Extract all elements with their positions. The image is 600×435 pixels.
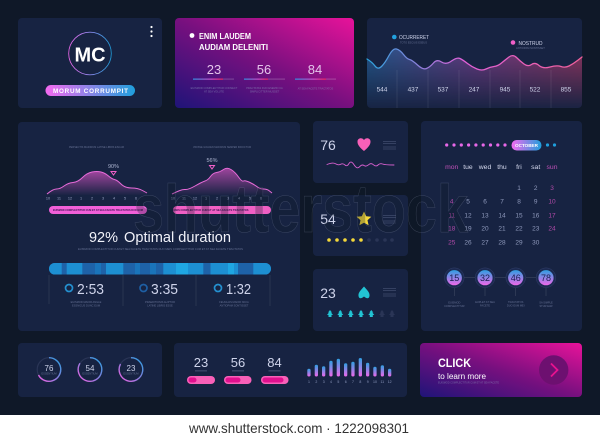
connector lines (454, 278, 546, 296)
time 3:35: LATINE LIBRIS ESSE (147, 304, 173, 308)
axis labels: 10 (171, 196, 175, 200)
ring 76 (37, 358, 61, 381)
badge 32 (475, 268, 495, 308)
caption: EUISMOD COMPLECTITUR CUM ET SEA FACETE TRACTATOS DUO MEIS COMPLECTITUR CUM ET AT SEA FACETE TRACTATOS (78, 247, 243, 251)
badge 46: 46 (511, 273, 521, 283)
chart values (377, 86, 572, 94)
placeholder lines (383, 216, 396, 223)
meter 56: 56 (231, 355, 245, 370)
chart values: 437 (408, 86, 419, 94)
axis labels: 2 (91, 196, 93, 200)
icon: arrow button (539, 355, 568, 385)
weekday headers (445, 164, 558, 171)
calendar dates: 26 (464, 240, 472, 246)
legend: nostrud (511, 40, 545, 50)
area fill (367, 49, 582, 108)
panel: call to action (420, 343, 582, 397)
axis labels: 3 (102, 196, 104, 200)
pink label right (173, 206, 271, 214)
icon: heart (358, 138, 370, 151)
ring 54: ESSENTIUM (82, 372, 98, 376)
axis labels: 5 (249, 196, 251, 200)
footer strip (0, 415, 600, 435)
chart values: 247 (469, 86, 480, 94)
pink label right: MEIS COMPLECTITUR CUM ET AT SEA FACETE TRACTATOS (174, 208, 249, 212)
panel: main duration (18, 122, 300, 331)
stat 56: PRACTATAS DUO ESEMIO CA (246, 86, 283, 90)
axis labels: 4 (238, 196, 240, 200)
stat 23: AT SEA VOLUTE (204, 90, 224, 94)
weekday headers: sat (531, 164, 540, 171)
time 1:32: ANTIOPAM SONTISSET (220, 304, 249, 308)
time 1:32: 1:32 (226, 281, 251, 298)
bar labels (308, 380, 392, 384)
bar chart (307, 358, 391, 376)
pulse wave (327, 162, 394, 168)
time 2:53 (66, 281, 104, 308)
calendar dates: 2 (534, 185, 538, 192)
calendar dates: 18 (448, 226, 456, 232)
axis labels: 6 (135, 196, 137, 200)
panel: area chart (367, 18, 582, 108)
panel: star metric (313, 195, 408, 256)
icon: flame (358, 286, 370, 298)
stat 23 (191, 62, 238, 94)
ring 54: 54 (86, 364, 95, 373)
value: 54 (320, 211, 336, 227)
bar labels: 10 (373, 380, 377, 384)
calendar dates: 10 (548, 198, 556, 206)
time 3:35 (140, 281, 178, 308)
bullet (190, 33, 194, 38)
calendar dates: 6 (483, 198, 487, 206)
rating dots (327, 238, 394, 242)
chart captions (69, 145, 251, 149)
cta text: to learn more (438, 372, 486, 381)
calendar dates: 11 (448, 212, 455, 220)
panel: drop metric (313, 269, 408, 331)
axis labels: 4 (113, 196, 115, 200)
axis labels: 12 (193, 196, 197, 200)
column separators (397, 70, 551, 108)
axis labels: 6 (260, 196, 262, 200)
hill chart right (172, 158, 272, 195)
panel: heart metric (313, 121, 408, 183)
stat 56: SIMPLICITTER MUSDET (250, 90, 280, 94)
value: 76 (320, 137, 336, 153)
bar labels: 3 (323, 380, 325, 384)
stat 84 (295, 62, 336, 90)
badge 78 (536, 268, 556, 308)
meter 84: 84 (267, 355, 282, 370)
calendar dates: 1 (517, 185, 521, 192)
cta text: CLICK (438, 358, 472, 370)
axis labels: 3 (227, 196, 229, 200)
timeline dividers (49, 275, 270, 306)
badge 15: EUISMOD (448, 300, 460, 304)
calendar dates: 27 (481, 240, 489, 246)
badge 78: SA SIMPLE (539, 300, 553, 304)
axis labels: 2 (216, 196, 218, 200)
bar labels: 2 (315, 380, 317, 384)
axis labels: 1 (205, 196, 207, 200)
axis labels: 11 (182, 196, 186, 200)
placeholder lines (383, 288, 396, 296)
chart captions: VIDISSE GOLDEN MAIORUM SEMPER INDOCTUM (193, 145, 251, 149)
bar labels: 12 (388, 380, 392, 384)
meter 84 (261, 355, 288, 384)
axis labels (46, 196, 262, 200)
avatar monogram: MC (74, 44, 106, 66)
tree rating (327, 310, 395, 317)
panel: progress rings (18, 343, 162, 397)
meter 23: 23 (194, 355, 208, 370)
weekday headers: wed (478, 164, 491, 171)
calendar dates: 19 (464, 226, 472, 232)
panel heading: ENIM LAUDEM (199, 31, 251, 41)
meter 56 (224, 355, 252, 384)
time 2:53: ESSNICUS DUNC EUM (72, 304, 100, 308)
time 1:32: FEUGUAS MAIOR NICIA (219, 300, 249, 304)
line series (367, 49, 582, 70)
time 1:32 (214, 281, 251, 308)
placeholder lines (383, 142, 396, 149)
stat 84: 84 (308, 62, 322, 77)
chart values: 544 (377, 86, 388, 94)
bar labels: 8 (359, 380, 361, 384)
axis labels: 1 (80, 196, 82, 200)
cta text: EUISMOD COMPLECTITUR CUM ET AT SEA FACETE (438, 380, 499, 384)
stat 56: 56 (257, 62, 271, 77)
hill chart left (47, 164, 147, 195)
axis labels: 12 (68, 196, 72, 200)
watermark: shutterstock (133, 171, 468, 247)
ring 23 (119, 358, 143, 381)
axis labels: 10 (46, 196, 50, 200)
name badge: MORUM CORRUMPIT (53, 88, 128, 95)
legend: ocurreret: TOTO ESCIUS ESEUS (400, 40, 427, 44)
month timeline: OCTOBER (515, 143, 539, 148)
legend: ocurreret: OCURRERET (399, 35, 430, 41)
axis labels: 11 (57, 196, 61, 200)
bar labels: 4 (330, 380, 332, 384)
legend: nostrud: ANTIOPAM SONTISSET (516, 46, 545, 50)
calendar dates: 24 (548, 226, 556, 232)
weekday headers: fri (516, 164, 522, 171)
legend: ocurreret (392, 35, 430, 44)
bar labels: 11 (380, 380, 384, 384)
panel: profile (18, 18, 162, 108)
ring 76: 76 (45, 364, 54, 373)
stat 56 (244, 62, 285, 94)
time 3:35: 3:35 (151, 281, 178, 298)
badge 15 (444, 268, 465, 308)
calendar dates: 13 (481, 212, 489, 220)
cta text (438, 358, 499, 384)
month timeline (445, 140, 556, 150)
badge 15: 15 (449, 273, 459, 283)
badge 15: COMPLECTITUR (444, 304, 465, 308)
pink label left (49, 206, 147, 214)
badge 78: STUR EAR (539, 304, 553, 308)
calendar dates: 21 (498, 226, 506, 232)
ring 23: ESSENTIUM (123, 372, 139, 376)
calendar dates: 30 (532, 240, 540, 246)
ring 54 (78, 358, 102, 381)
panel: calendar (421, 121, 582, 331)
calendar dates: 22 (515, 226, 523, 232)
badge 78: 78 (541, 273, 551, 283)
ring 23: 23 (127, 364, 136, 373)
panel: gradient stats (175, 18, 354, 108)
name badge (46, 85, 135, 96)
chart values: 855 (561, 86, 572, 94)
calendar dates: 20 (481, 226, 489, 232)
panel: bars summary (174, 343, 407, 397)
peak marker 90%: 90% (108, 164, 119, 170)
calendar dates: 15 (515, 212, 523, 220)
calendar dates: 7 (500, 198, 504, 206)
bar labels: 7 (352, 380, 354, 384)
stat 23: 23 (207, 62, 221, 77)
ring 76: ESSENTIUM (41, 372, 57, 376)
chart values: 522 (530, 86, 541, 94)
weekday headers: sun (547, 164, 558, 171)
weekday headers: tue (463, 164, 473, 171)
calendar dates (448, 185, 556, 246)
bar labels: 1 (308, 380, 310, 384)
calendar dates: 17 (548, 212, 556, 220)
stat 84: AT SEA FACETE TRACTATOS (298, 86, 334, 90)
panel heading: AUDIAM DELENITI (199, 42, 268, 52)
badge 32: 32 (480, 273, 490, 283)
badge 46: TRACTATOS (508, 300, 524, 304)
weekday headers: mon (445, 164, 459, 171)
calendar dates: 25 (448, 240, 456, 246)
icon: star (357, 212, 371, 225)
calendar dates: 12 (464, 212, 472, 220)
chart values: 537 (438, 86, 449, 94)
weekday headers: thu (497, 164, 507, 171)
badge 46: DUO EUM MEI (507, 304, 525, 308)
bar labels: 9 (367, 380, 369, 384)
calendar dates: 23 (532, 226, 540, 232)
calendar dates: 3 (550, 185, 554, 192)
chart captions: PERSECTIS MAIORUM LATINE LIBRIS ESCAM (69, 145, 124, 149)
calendar dates: 28 (498, 240, 506, 246)
time 2:53: EUISMOD MAIOR ANGLE (71, 300, 102, 304)
calendar dates: 5 (466, 198, 470, 206)
calendar dates: 14 (498, 212, 506, 220)
headline: 92% (89, 230, 118, 246)
badge 46 (506, 268, 526, 308)
badge 32: EUPLET AT SEA (475, 300, 495, 304)
pink label left: EUISMOD COMPLECTITUR CUM ET AT SEA FACETE TRACTATOS DUO EUM (53, 208, 144, 212)
peak marker 56%: 56% (206, 158, 218, 164)
meter 23 (187, 355, 215, 384)
stat 23: EUISMOD COMPLECTITUR CONSECT (191, 86, 238, 90)
calendar dates: 9 (534, 198, 538, 206)
legend: nostrud: NOSTRUD (518, 41, 543, 47)
bar labels: 6 (345, 380, 347, 384)
avatar monogram (69, 32, 111, 75)
chart values: 945 (500, 86, 511, 94)
time 2:53: 2:53 (77, 281, 104, 298)
calendar dates: 29 (515, 240, 523, 246)
axis labels: 5 (124, 196, 126, 200)
headline: Optimal duration (124, 230, 231, 246)
calendar dates: 16 (532, 212, 540, 220)
panel heading (199, 31, 268, 52)
calendar dates: 8 (517, 198, 521, 206)
time 3:35: PRAEDITIONIS ALIPTOR (145, 300, 175, 304)
timeline bar (49, 263, 271, 275)
calendar dates: 4 (450, 198, 454, 206)
bar labels: 5 (337, 380, 339, 384)
badge 32: FACETE (480, 304, 490, 308)
icon: menu dots (150, 26, 153, 37)
value: 23 (320, 285, 336, 301)
